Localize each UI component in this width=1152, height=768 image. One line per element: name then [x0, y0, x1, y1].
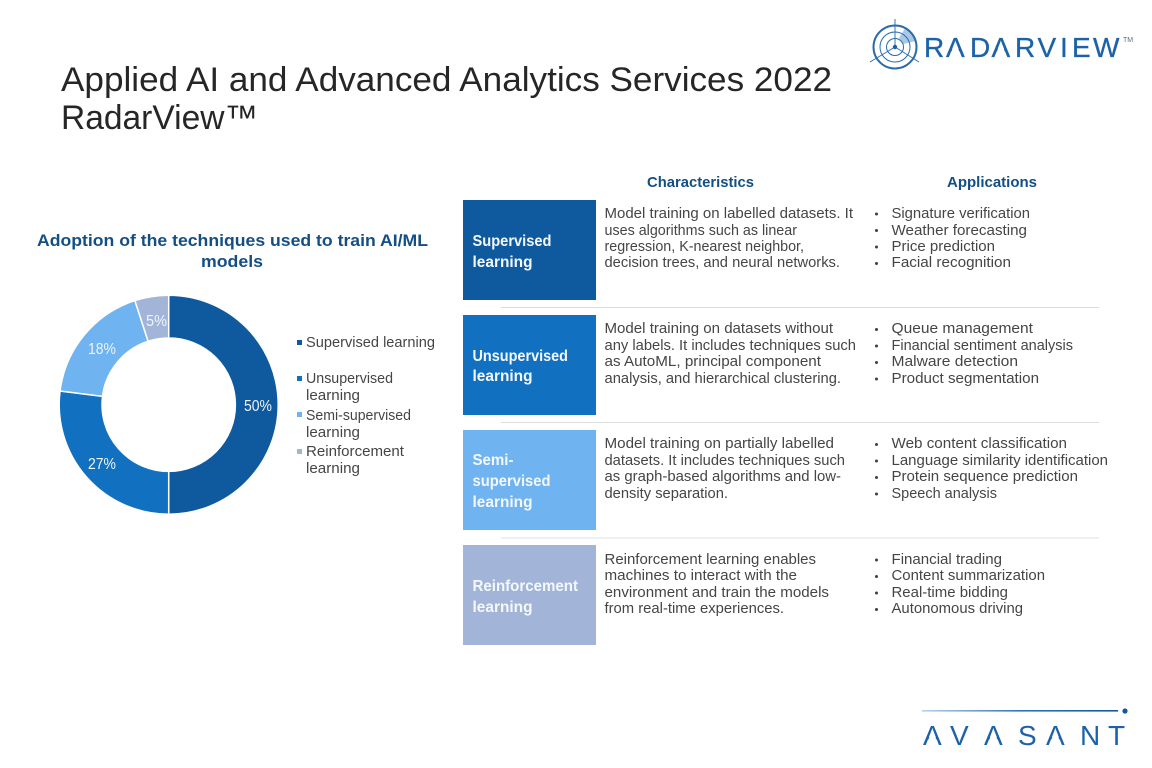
characteristics: machines to interact with the: [604, 567, 797, 584]
slice: semi-supervised 18%: [60, 301, 148, 396]
donut value labels: 18%: [88, 341, 116, 358]
chart legend: [297, 334, 435, 477]
applications: Weather forecasting: [892, 222, 1027, 239]
label: [472, 233, 552, 271]
label: learning: [472, 254, 532, 271]
applications: Signature verification: [892, 205, 1030, 222]
chart legend: Supervised learning: [306, 334, 435, 351]
label box: [463, 430, 596, 530]
applications: Protein sequence prediction: [892, 468, 1078, 485]
chart title: models: [201, 252, 263, 271]
characteristics: [604, 320, 856, 387]
characteristics: decision trees, and neural networks.: [604, 254, 840, 271]
characteristics: analysis, and hierarchical clustering.: [604, 370, 841, 387]
logo wordmark: RADARVIEW: [924, 32, 1120, 63]
row: reinforcement learning: [463, 545, 1045, 645]
donut value labels: 5%: [146, 313, 167, 330]
label: [472, 452, 550, 511]
label: learning: [472, 494, 532, 511]
chart legend: learning: [306, 460, 360, 477]
characteristics: [604, 435, 845, 502]
chart legend: learning: [306, 424, 360, 441]
chart legend: Unsupervised: [306, 370, 393, 387]
applications: [875, 320, 1073, 387]
icon: radar: [870, 19, 919, 68]
label: [472, 348, 568, 385]
label box: [463, 545, 596, 645]
applications: Price prediction: [892, 238, 995, 255]
applications: Web content classification: [892, 435, 1067, 452]
chart title: [37, 231, 428, 271]
column headings: [647, 174, 1037, 191]
characteristics: from real-time experiences.: [604, 600, 784, 617]
applications: [875, 205, 1030, 271]
label: supervised: [472, 473, 550, 490]
column headings: Applications: [947, 174, 1037, 191]
applications: Financial trading: [892, 551, 1002, 568]
logo rule: [922, 710, 1118, 712]
characteristics: Model training on partially labelled: [604, 435, 834, 452]
applications: Product segmentation: [892, 370, 1039, 387]
row: supervised learning: [463, 200, 1030, 300]
applications: Autonomous driving: [892, 600, 1023, 617]
applications: Language similarity identification: [892, 452, 1108, 469]
title: RadarView™: [61, 99, 258, 137]
applications: Malware detection: [892, 353, 1018, 370]
slice: unsupervised 27%: [59, 391, 169, 514]
logo dot: [1122, 708, 1128, 714]
slice: reinforcement 5%: [135, 295, 169, 341]
chart legend: Semi-supervised: [306, 407, 411, 424]
chart legend: Reinforcement: [306, 443, 405, 460]
title: Applied AI and Advanced Analytics Services 2022: [61, 61, 832, 99]
chart legend: learning: [306, 387, 360, 404]
characteristics: Model training on datasets without: [604, 320, 834, 337]
label: learning: [472, 599, 532, 616]
chart title: Adoption of the techniques used to train AI/ML: [37, 231, 428, 250]
label: Reinforcement: [472, 578, 579, 595]
slice: supervised 50%: [169, 295, 278, 514]
donut value labels: 50%: [244, 398, 272, 415]
label: Supervised: [472, 233, 552, 250]
label: [472, 578, 579, 616]
characteristics: [604, 205, 854, 271]
row: unsupervised learning: [463, 315, 1073, 415]
logo: Avasant: [922, 708, 1128, 751]
donut value labels: 27%: [88, 456, 116, 473]
applications: [875, 551, 1045, 617]
characteristics: Reinforcement learning enables: [604, 551, 816, 568]
applications: Speech analysis: [892, 485, 997, 502]
applications: Real-time bidding: [892, 584, 1008, 601]
characteristics: any labels. It includes techniques such: [604, 337, 856, 354]
column headings: Characteristics: [647, 174, 754, 191]
characteristics: density separation.: [604, 485, 728, 502]
donut value labels: [88, 313, 272, 473]
label: Unsupervised: [472, 348, 568, 365]
applications: [875, 435, 1108, 502]
characteristics: as graph-based algorithms and low-: [604, 468, 841, 485]
logo: RadarView: [870, 19, 1133, 68]
label box: [463, 200, 596, 300]
characteristics: regression, K-nearest neighbor,: [604, 238, 804, 255]
characteristics: environment and train the models: [604, 584, 829, 601]
characteristics: as AutoML, principal component: [604, 353, 822, 370]
label: learning: [472, 368, 532, 385]
characteristics: uses algorithms such as linear: [604, 222, 797, 239]
label: Semi-: [472, 452, 514, 469]
label box: [463, 315, 596, 415]
applications: Queue management: [892, 320, 1034, 337]
applications: Financial sentiment analysis: [892, 337, 1073, 354]
trademark: TM: [1123, 37, 1133, 44]
applications: Content summarization: [892, 567, 1045, 584]
donut chart: [59, 295, 278, 514]
characteristics: [604, 551, 829, 617]
title: [61, 61, 832, 137]
characteristics: datasets. It includes techniques such: [604, 452, 845, 469]
row: semi-supervised learning: [463, 430, 1108, 530]
characteristics: Model training on labelled datasets. It: [604, 205, 854, 222]
logo wordmark: AVASANT: [923, 720, 1125, 751]
applications: Facial recognition: [892, 254, 1011, 271]
